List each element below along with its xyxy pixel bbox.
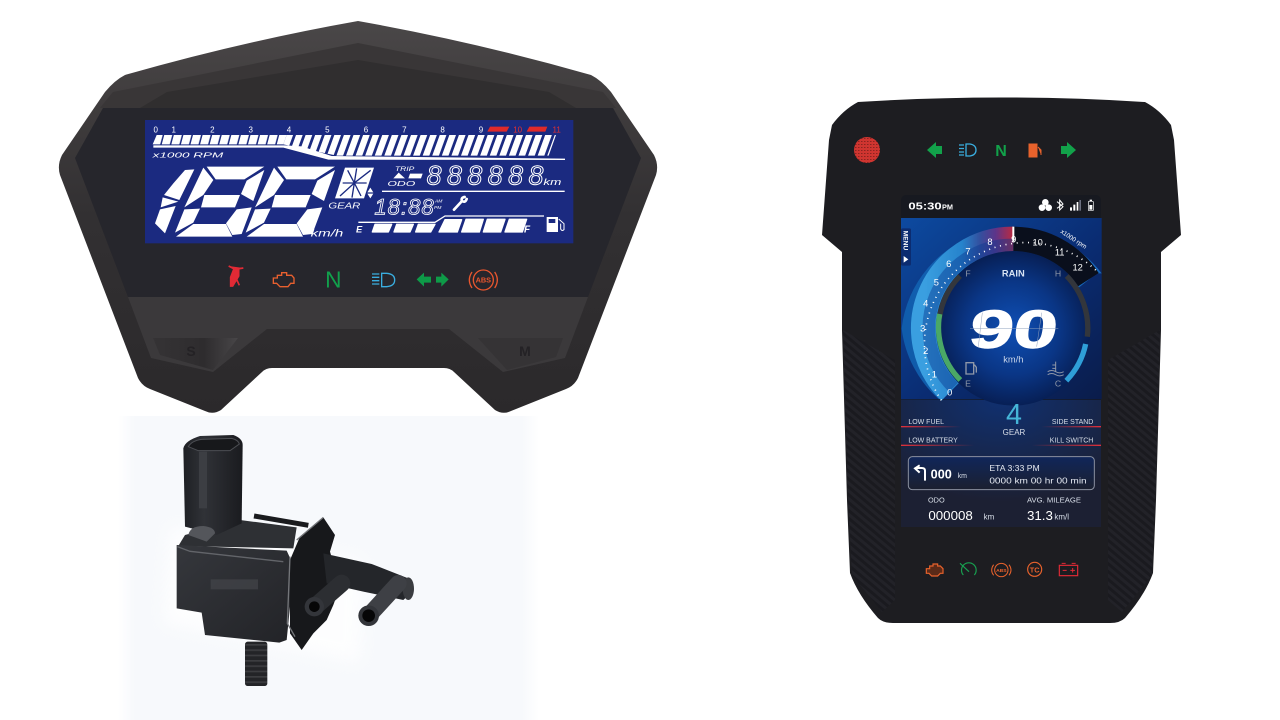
status bar: 05:30 [908,201,942,212]
rpm numerals: 11 [1055,248,1065,258]
rpm scale numbers: 10 [513,125,523,134]
speed unit: km/h [1003,355,1023,365]
cluster face [75,108,641,297]
rpm numerals: 5 [934,277,939,287]
rpm numerals: 6 [946,259,951,269]
icon: engine lamp [926,564,943,576]
rpm scale numbers: 11 [553,125,561,134]
rpm numerals: 12 [1072,262,1083,272]
nozzle [323,553,414,600]
icon: tc lamp: TC [1030,565,1040,574]
rpm unit: x1000 rpm [1059,228,1088,251]
flange [290,517,340,650]
icon: turn left arrow [915,465,925,481]
icon: abs lamp [992,563,1011,577]
body edge highlight [177,547,283,562]
tick ring [924,243,1099,400]
mileage readout [1027,496,1081,523]
icon: battery lamp [1059,563,1078,576]
am pm labels: AM [434,198,443,204]
gauge labels [965,269,1061,389]
fuel gauge [356,216,564,235]
icon: abs lamp: ABS [996,568,1007,574]
icon: right arrow [1061,142,1076,158]
gauge labels: C [1055,379,1061,389]
status bar [908,199,1093,212]
rpm numerals [920,234,1083,397]
icon: coolant [1048,362,1064,376]
odometer readout [928,496,995,523]
warning label side stand: SIDE STAND [1052,419,1093,426]
left grip texture [843,330,895,612]
rpm scale numbers: 9 [479,125,484,134]
warning label low fuel [901,419,961,427]
gear indicator [328,168,374,211]
menu tab: MENU [901,231,908,250]
icon: fuel pump [1029,144,1041,157]
fuel gauge: E [356,224,363,234]
speed value: 90 [966,300,1062,359]
cluster housing [59,21,657,413]
icon: engine check [273,273,294,287]
threaded bolt [245,642,267,686]
photo backdrop behind valve [118,416,539,720]
soft white plastic haze [163,527,363,663]
rpm scale numbers: 6 [364,125,369,134]
navigation panel: 0000 km 00 hr 00 min [989,475,1087,485]
rpm numerals: 1 [932,369,937,379]
top tell-tales [927,142,1076,160]
rpm numerals: 3 [920,324,925,334]
nozzle tip [403,577,414,600]
neutral letter: N [995,143,1007,160]
rpm numerals: 7 [965,246,971,256]
warning lamps row [229,266,497,292]
cluster housing [822,98,1181,623]
odometer readout: ODO [928,496,945,505]
rpm numerals: 10 [1032,238,1043,248]
rpm scale numbers: 3 [248,125,253,134]
trip and odo labels [387,166,423,188]
gauge labels: E [965,379,971,389]
connector rib [199,452,207,508]
status bar: PM [942,202,953,211]
gauge labels: F [965,269,971,279]
rpm unit label: x1000 RPM [151,153,224,160]
top facet [100,43,616,108]
divider [382,189,565,193]
trip and odo labels: TRIP [395,166,415,173]
icon: wrench [454,197,467,210]
icon: battery [1088,201,1093,211]
icon: left arrow [927,142,942,158]
odometer digits: 888888 [427,161,544,191]
collar highlight [188,526,215,542]
right TFT instrument cluster [822,98,1181,623]
rear rod [254,516,308,525]
icon: red lamp [854,137,880,163]
gear value: 4 [1006,399,1022,431]
screen upper part [901,199,1102,406]
redline needle [1012,227,1014,242]
temperature level arc [1066,344,1086,381]
rpm scale numbers: 7 [402,125,407,134]
icon: bluetooth [1057,200,1063,210]
rpm scale numbers: 8 [440,125,445,134]
outer tacho band [902,229,1102,399]
rpm scale numbers [153,125,561,134]
clock digits: 18:88 [374,194,434,219]
navigation panel: km [958,473,967,480]
am pm labels: PM [434,205,442,211]
valve photograph illustration [163,435,414,686]
neutral letter: N [325,266,342,292]
button M [478,338,563,370]
fuel and temp grey arcs [939,276,1088,337]
rpm scale numbers: 5 [325,125,330,134]
fuel gauge: F [524,224,531,235]
dial background [901,218,1102,399]
am pm labels [434,198,443,211]
mileage readout: km/l [1054,512,1069,521]
screen [901,195,1101,527]
rpm bar graph [153,135,565,160]
gauge labels: H [1055,269,1061,279]
icon: fuel pump small [966,363,976,374]
warning label low battery: LOW BATTERY [908,438,958,445]
gear label: GEAR [1003,428,1026,437]
rpm colour sweep [923,239,1013,392]
button S [153,338,238,370]
warning label side stand [1042,419,1101,427]
icon: abs: ABS [476,276,491,285]
inner top facet [140,60,576,108]
odometer readout: 000008 [928,508,973,523]
navigation panel: 000 [931,467,952,481]
icon: tc lamp [1028,562,1042,576]
icon: signal [1070,202,1078,211]
fuel level arc [939,314,960,380]
rpm redline marks [487,127,547,132]
riding mode: RAIN [1002,269,1025,279]
rpm scale numbers: 0 [153,125,158,134]
tube one [305,583,342,616]
warning label kill switch [1032,438,1101,446]
screen lower part [901,399,1101,577]
button M: M [519,343,531,359]
right grip texture [1108,330,1160,612]
lower screen glow [901,400,1101,527]
lower panel [128,297,588,372]
connector opening [188,438,239,451]
inner disc [936,251,1091,406]
trip and odo labels: ODO [387,179,416,188]
icon: abs [469,270,497,290]
icon: side stand [229,266,243,286]
main body [177,545,294,643]
warning label low battery [901,438,974,446]
icon: traction gauge [960,563,976,575]
odometer unit: km [543,177,562,187]
rpm numerals: 9 [1011,234,1016,244]
button S: S [186,343,196,359]
rpm dark sweep [1013,239,1088,280]
mileage readout: AVG. MILEAGE [1027,496,1081,505]
mileage readout: 31.3 [1027,508,1053,523]
warning label kill switch: KILL SWITCH [1050,438,1093,445]
speed unit: km/h [311,228,344,239]
rpm numerals: 4 [923,298,928,308]
tube two [358,583,398,626]
odometer readout: km [984,512,995,521]
rpm numerals: 0 [947,387,952,397]
rpm numerals: 2 [923,346,928,356]
connector column [183,435,243,535]
icon: headlamp [959,144,976,156]
rpm sweep inner shading [929,245,1013,387]
rpm scale numbers: 1 [171,125,176,134]
embossed mark [211,579,258,589]
flange edge [287,517,323,637]
rpm scale numbers: 4 [287,125,292,134]
LCD screen [145,120,573,243]
icon: fan [1039,199,1052,211]
rpm numerals: 8 [987,237,993,247]
navigation panel: ETA 3:33 PM [989,463,1040,473]
speed digits [155,167,335,237]
rpm scale numbers: 2 [210,125,215,134]
gear indicator: GEAR [328,201,360,211]
navigation panel [908,457,1094,490]
menu tab [901,228,911,266]
left LCD instrument cluster [59,21,657,413]
warning label low fuel: LOW FUEL [908,419,944,426]
icon: headlamp [372,273,395,287]
icon: turn arrows [417,273,449,287]
body top face [178,520,297,548]
